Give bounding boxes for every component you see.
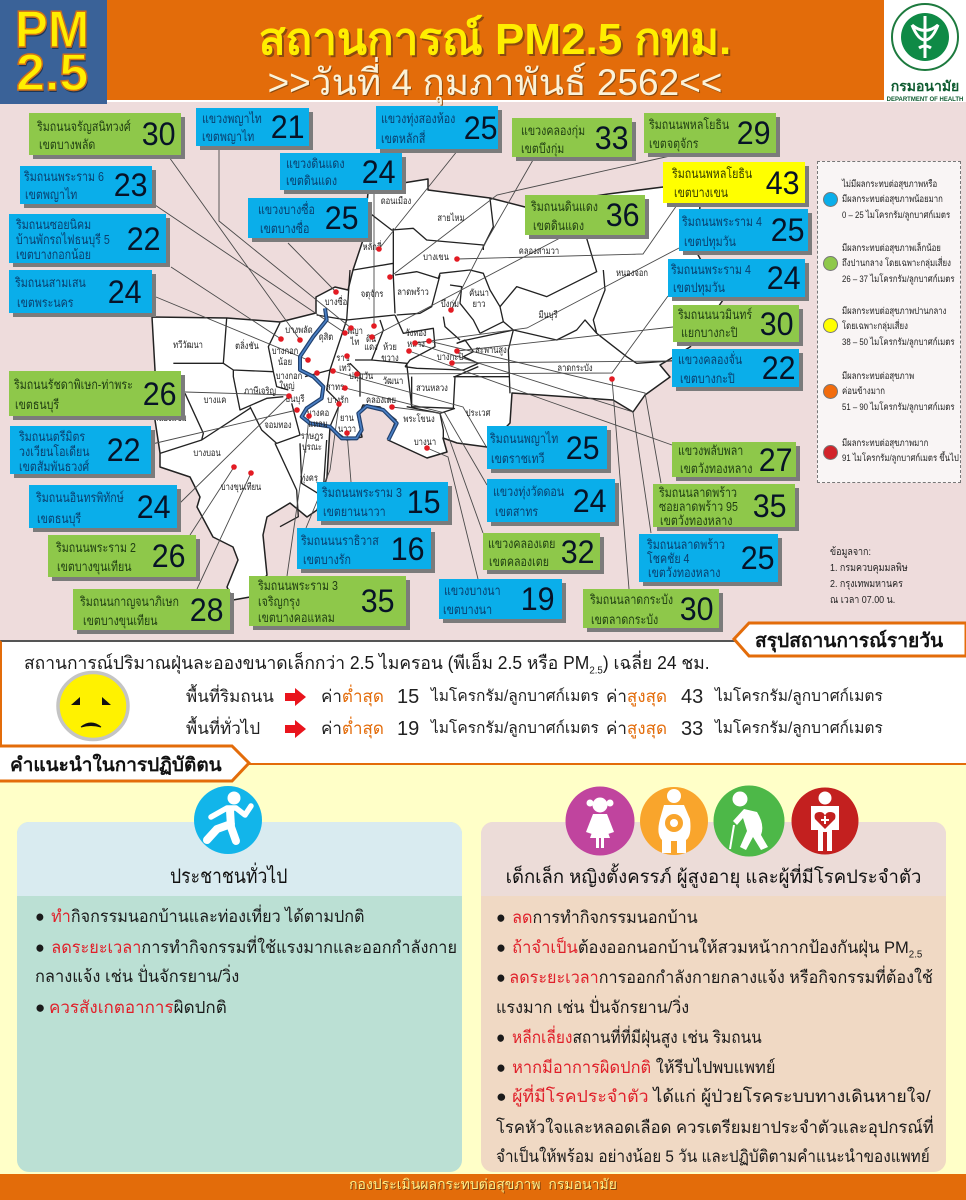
district names: น้อย	[278, 356, 292, 367]
footer bar: กองประเมินผลกระทบต่อสุขภาพ กรมอนามัย	[349, 1176, 617, 1192]
district names: คลองสามวา	[519, 245, 559, 256]
label: Phahonyothin Bang Khen 43: ริมถนนพหลโยธิน	[672, 166, 752, 181]
label: Ratchawithi Bang Rak 16	[297, 528, 431, 569]
district names: จอมทอง	[264, 419, 292, 430]
label: Khlong Kum 33: เขตบึงกุ่ม	[521, 141, 564, 156]
label: Phaya Thai 21: เขตพญาไท	[202, 129, 254, 144]
district names: ดุสิต	[319, 331, 333, 343]
label: Soi Nikhom 22: 22	[127, 220, 161, 256]
label: Rama 3 Yan Nawa 15: 15	[407, 484, 441, 520]
label: Inthara Phithak 24	[29, 485, 177, 528]
legend: yellow	[823, 306, 955, 348]
orange title band	[107, 0, 884, 100]
legend: yellow: โดยเฉพาะกลุ่มเสี่ยง	[842, 321, 908, 332]
label: Phahonyothin Bang Khen 43: 43	[766, 164, 800, 200]
district names: สายไหม	[437, 212, 465, 223]
label: Lat Phrao Chokchai 4 25: เขตวังทองหลาง	[648, 565, 720, 580]
label: Nawamin 30	[673, 305, 799, 342]
label: Samsen 24	[9, 270, 152, 313]
label: Thung Wat Don 24: เขตสาทร	[495, 504, 538, 519]
label: Din Daeng 24	[280, 153, 402, 190]
label: Phaya Thai Ratchathewi 25: ริมถนนพญาไท	[490, 431, 558, 446]
data source note: ณ เวลา 07.00 น.	[830, 594, 895, 606]
label: Khlong Chan 22: เขตบางกะปิ	[680, 371, 735, 386]
label: Phahonyothin Chatuchak 29	[644, 113, 776, 153]
label: Thung Wat Don 24: 24	[573, 482, 607, 518]
district names: นาวา	[338, 423, 356, 434]
label: Lat Phrao Chokchai 4 25: โชคชัย 4	[647, 551, 689, 566]
icon: chronic illness	[792, 788, 858, 854]
general public advice: ●	[35, 998, 45, 1017]
district names: คันนา	[469, 287, 489, 298]
label: Rama 4 Pathum Wan 24: เขตปทุมวัน	[673, 280, 725, 295]
at-risk advice: ●	[496, 1087, 507, 1106]
icon: running person	[194, 786, 262, 854]
label: Lat Krabang 30	[583, 589, 719, 628]
general public advice: กลางแจ้ง เช่น ปั่นจักรยาน/วิ่ง	[35, 967, 239, 986]
legend: red: มีผลกระทบต่อสุขภาพมาก	[842, 438, 928, 449]
label: Lat Phrao 95 35: ริมถนนลาดพร้าว	[659, 485, 737, 500]
district names: หลาง	[407, 338, 425, 349]
district names: ทุ่งครุ	[300, 472, 318, 484]
label: Rama 6 23	[20, 166, 152, 204]
label: Khlong Kum 33: แขวงคลองกุ่ม	[521, 123, 585, 138]
label: Nawamin 30: แยกบางกะปิ	[681, 325, 737, 340]
legend: orange: 51 – 90 ไมโครกรัม/ลูกบาศก์เมตร	[842, 402, 955, 413]
at-risk advice: ●	[496, 908, 506, 927]
label: Phaya Thai Ratchathewi 25: 25	[566, 430, 600, 466]
label: Din Daeng 24: แขวงดินแดง	[286, 156, 345, 171]
label: Samsen 24: 24	[108, 274, 142, 310]
label: Rama 4 Pathum Wan 25: ริมถนนพระราม 4	[682, 214, 762, 229]
data source note: 2. กรุงเทพมหานคร	[830, 578, 903, 590]
district names: สวนหลวง	[416, 382, 448, 393]
at-risk advice	[496, 908, 934, 1166]
district names: ตลิ่งชัน	[235, 339, 259, 351]
label: Inthara Phithak 24: 24	[137, 488, 171, 524]
label: Kanchanaphisek 28: เขตบางขุนเทียน	[83, 613, 158, 628]
district names: วัฒนา	[383, 375, 403, 386]
icon: pregnant woman	[640, 787, 708, 855]
label: Rama 3 Yan Nawa 15	[317, 482, 448, 521]
label: Rama 6 23: เขตพญาไท	[25, 187, 77, 202]
title: สถานการณ์ PM2.5 กทม.	[259, 15, 731, 64]
legend: blue: ไม่มีผลกระทบต่อสุขภาพหรือ	[842, 179, 937, 190]
label: Rama 3 Yan Nawa 15: เขตยานนาวา	[323, 504, 386, 519]
label: Din Daeng 24: 24	[362, 154, 396, 190]
label: Khlong Chan 22: แขวงคลองจั่น	[678, 352, 742, 367]
district names: หนองแขม	[153, 412, 187, 423]
label: Rama 2 26: 26	[152, 538, 186, 574]
label: Bang Sue 25: เขตบางซื่อ	[260, 221, 309, 236]
label: Rama 4 Pathum Wan 25: เขตปทุมวัน	[684, 234, 736, 249]
subtitle date: >>วันที่ 4 กุมภาพันธ์ 2562<<	[268, 62, 722, 103]
district names: บางคอ	[307, 407, 329, 418]
row: general area: ไมโครกรัม/ลูกบาศก์เมตร	[431, 720, 599, 737]
label: Lat Phrao Chokchai 4 25: 25	[741, 540, 775, 576]
row: general area: ไมโครกรัม/ลูกบาศก์เมตร	[715, 720, 883, 737]
district names: แดง	[364, 341, 378, 352]
label: Rama 6 23: ริมถนนพระราม 6	[24, 169, 104, 184]
row: general area: 33	[681, 718, 703, 740]
label: Phahonyothin Chatuchak 29: ริมถนนพหลโยธิน	[649, 117, 729, 132]
label: Ratchawithi Bang Rak 16: ริมถนนนราธิวาส	[301, 533, 379, 548]
row: general area: ค่าสูงสุด	[606, 719, 667, 738]
label: Soi Nikhom 22: เขตบางกอกน้อย	[16, 247, 91, 262]
label: Lat Phrao Chokchai 4 25	[639, 534, 778, 582]
label: Phahonyothin Bang Khen 43	[663, 162, 805, 203]
district names: หลักสี่	[363, 240, 382, 252]
general public heading: ประชาชนทั่วไป	[170, 866, 287, 888]
district names: ไท	[350, 336, 360, 347]
row: general area	[186, 716, 883, 740]
label: Nawamin 30: 30	[760, 306, 794, 342]
label: Charan Sanitwong 30: ริมถนนจรัญสนิทวงศ์	[37, 119, 131, 134]
label: Samsen 24: เขตพระนคร	[17, 295, 73, 310]
district names: ดอนเมือง	[381, 195, 411, 206]
row: general area: พื้นที่ทั่วไป	[186, 719, 260, 738]
legend: green: ถึงปานกลาง โดยเฉพาะกลุ่มเสี่ยง	[842, 258, 951, 269]
row: general area: ค่าต่ำสุด	[321, 719, 384, 738]
label: Khlong Toei 32: แขวงคลองเตย	[488, 536, 555, 551]
icon: elderly person	[714, 786, 784, 856]
label: Phlapphla 27	[672, 442, 796, 477]
at-risk advice: ●	[496, 1028, 505, 1047]
label: Soi Nikhom 22: ริมถนนซอยนิคม	[16, 217, 91, 232]
at-risk advice: หลีกเลี่ยงสถานที่ที่มีฝุ่นสูง เช่น ริมถนน	[512, 1028, 762, 1047]
label: Bang Na 19: 19	[521, 581, 555, 617]
row: roadside: 15	[397, 686, 419, 708]
label: Phaya Thai 21: 21	[271, 109, 305, 145]
legend: yellow: มีผลกระทบต่อสุขภาพปานกลาง	[842, 306, 946, 317]
label: Lat Phrao 95 35: เขตวังทองหลาง	[660, 513, 732, 528]
district names: สาทร	[326, 381, 344, 392]
label: Ratchawithi Bang Rak 16: เขตบางรัก	[303, 552, 351, 567]
label: Khlong Toei 32	[483, 533, 600, 570]
data source note: ข้อมูลจาก:	[830, 546, 871, 558]
label: Rama 4 Pathum Wan 25	[679, 209, 808, 251]
district names: บางกอก	[272, 345, 298, 356]
general public advice: ●	[35, 907, 45, 926]
district names: ราช	[336, 352, 350, 363]
header background	[0, 0, 966, 104]
district names: หนองจอก	[616, 267, 648, 278]
label: Phahonyothin Bang Khen 43: เขตบางเขน	[674, 185, 728, 200]
district names: ภาษีเจริญ	[244, 385, 276, 396]
at-risk advice: โรคหัวใจและหลอดเลือด ควรเตรียมยาประจำตัวและอุปกรณ์ที่	[496, 1118, 934, 1137]
label: Bang Na 19: แขวงบางนา	[444, 583, 501, 598]
label: Thung Song Hong 25: เขตหลักสี่	[381, 131, 425, 146]
district names: แหลม	[308, 418, 328, 429]
PM2.5 badge	[0, 0, 107, 104]
pink map background	[0, 102, 966, 640]
district names: ราษฎร	[301, 430, 324, 441]
district names: บางซื่อ	[325, 295, 347, 307]
panel: general public	[17, 822, 462, 1172]
footer bar	[0, 1174, 966, 1200]
legend: green: มีผลกระทบต่อสุขภาพเล็กน้อย	[842, 243, 941, 254]
district names: ดิน	[366, 333, 376, 344]
label: Lat Phrao 95 35	[653, 484, 795, 527]
summary headline: สถานการณ์ปริมาณฝุ่นละอองขนาดเล็กกว่า 2.5 ไมครอน (พีเอ็ม 2.5 หรือ PM2.5) เฉลี่ย 24 ชม.	[24, 653, 710, 677]
general public advice: ●	[35, 938, 45, 957]
label: Bang Na 19	[439, 579, 562, 619]
district names: ขวาง	[381, 352, 399, 363]
logo: department of health	[887, 3, 963, 103]
label: Bang Sue 25	[248, 198, 368, 238]
district names: บางบอน	[193, 447, 221, 458]
at-risk advice: ลดการทำกิจกรรมนอกบ้าน	[512, 908, 698, 927]
district names: ใหญ่	[279, 380, 295, 391]
label: Phaya Thai Ratchathewi 25: เขตราชเทวี	[491, 451, 544, 466]
label: Rama 3 Charoen Krung 35: 35	[361, 583, 395, 619]
label: Soi Nikhom 22: บ้านพักรถไฟธนบุรี 5	[16, 232, 110, 247]
label: Tri Mit 22	[10, 426, 151, 474]
district names: บางเขน	[423, 251, 449, 262]
tag: daily summary heading: สรุปสถานการณ์รายวัน	[755, 629, 944, 653]
label: Din Daeng 24: เขตดินแดง	[286, 173, 337, 188]
legend: blue	[823, 178, 950, 221]
label: Din Daeng road 36: 36	[606, 197, 640, 233]
label: Thung Song Hong 25: แขวงทุ่งสองห้อง	[381, 111, 455, 126]
district names: บางกอก	[276, 370, 302, 381]
label: Ratchadaphisek 26: เขตธนบุรี	[15, 397, 59, 412]
data source note	[830, 546, 908, 606]
label: Tri Mit 22: 22	[107, 432, 141, 468]
district names: บึงกุ่ม	[441, 298, 459, 310]
label: Ratchawithi Bang Rak 16: 16	[391, 530, 425, 566]
district names: จตุจักร	[361, 288, 384, 300]
legend panel	[817, 161, 961, 483]
label: Khlong Chan 22: 22	[762, 350, 796, 386]
label: Thung Song Hong 25	[376, 106, 498, 149]
at-risk advice: ●	[496, 938, 506, 957]
at-risk advice: ลดระยะเวลาการออกกำลังกายกลางแจ้ง หรือกิจกรรมที่ต้องใช้	[509, 968, 933, 987]
label: Inthara Phithak 24: ริมถนนอินทรพิทักษ์	[36, 490, 124, 505]
pollution monitoring dots	[231, 246, 615, 476]
label: Rama 4 Pathum Wan 24: 24	[767, 260, 801, 296]
label: Khlong Chan 22	[672, 349, 799, 387]
label: Phahonyothin Chatuchak 29: 29	[737, 115, 771, 151]
district names: ยาว	[473, 298, 486, 309]
district names: ลาดกระบัง	[557, 362, 593, 373]
label: Tri Mit 22: เขตสัมพันธวงศ์	[19, 459, 89, 474]
legend: orange	[823, 371, 955, 413]
at-risk advice: จำเป็นให้พร้อม อย่างน้อย 5 วัน และปฏิบัติตามคำแนะนำของแพทย์	[496, 1147, 930, 1166]
label: Lat Krabang 30: 30	[680, 590, 714, 626]
row: general area: 19	[397, 718, 419, 740]
label: Rama 4 Pathum Wan 24: ริมถนนพระราม 4	[671, 262, 751, 277]
row: roadside	[186, 684, 883, 708]
label: Lat Phrao 95 35: 35	[753, 488, 787, 524]
legend: red: 91 ไมโครกรัม/ลูกบาศก์เมตร ขึ้นไป	[842, 453, 959, 464]
label: Phlapphla 27: แขวงพลับพลา	[678, 443, 743, 458]
general public heading	[17, 822, 462, 896]
label: Khlong Kum 33	[512, 118, 632, 157]
label: Inthara Phithak 24: เขตธนบุรี	[37, 511, 81, 526]
label: Khlong Toei 32: เขตคลองเตย	[489, 554, 549, 569]
label: Tri Mit 22: วงเวียนโอเดียน	[19, 444, 90, 459]
district names: วังทอง	[405, 327, 427, 338]
label: Din Daeng road 36	[525, 195, 645, 235]
district names: พญา	[347, 325, 363, 336]
general public advice	[35, 904, 457, 1017]
at-risk advice: ●	[496, 968, 506, 987]
row: roadside: ไมโครกรัม/ลูกบาศก์เมตร	[431, 688, 599, 705]
label: Kanchanaphisek 28	[73, 589, 230, 630]
general public advice: ควรสังเกตอาการผิดปกติ	[49, 998, 227, 1017]
label: Thung Wat Don 24	[487, 479, 615, 522]
label: Rama 4 Pathum Wan 25: 25	[771, 212, 805, 248]
district names: บางรัก	[327, 394, 349, 405]
label: Phaya Thai 21: แขวงพญาไท	[202, 111, 262, 126]
panel: at-risk groups	[481, 822, 946, 1172]
label: Lat Krabang 30: เขตลาดกระบัง	[591, 612, 658, 627]
at-risk advice: ผู้ที่มีโรคประจำตัว ได้แก่ ผู้ป่วยโรคระบบทางเดินหายใจ/	[512, 1087, 931, 1106]
label: Din Daeng road 36: ริมถนนดินแดง	[531, 199, 598, 214]
label: Ratchadaphisek 26: 26	[143, 376, 177, 412]
label: Rama 2 26	[48, 535, 196, 577]
label: Rama 3 Charoen Krung 35: เจริญกรุง	[258, 594, 300, 609]
label: Kanchanaphisek 28: 28	[190, 592, 224, 628]
district names: บางพลัด	[285, 324, 313, 335]
at-risk advice: หากมีอาการผิดปกติ ให้รีบไปพบแพทย์	[512, 1058, 775, 1077]
row: roadside: ค่าต่ำสุด	[321, 687, 384, 706]
label: Bang Sue 25: แขวงบางซื่อ	[258, 202, 315, 217]
legend: blue: 0 – 25 ไมโครกรัม/ลูกบาศก์เมตร	[842, 210, 950, 221]
at-risk advice: แรงมาก เช่น ปั่นจักรยาน/วิ่ง	[496, 998, 689, 1017]
legend: blue: มีผลกระทบต่อสุขภาพน้อยมาก	[842, 194, 943, 205]
district names: ธนบุรี	[286, 393, 305, 405]
label: Bang Sue 25: 25	[325, 200, 359, 236]
district names: บูรณะ	[302, 441, 322, 453]
label: Soi Nikhom 22	[9, 214, 166, 263]
icon: sad face	[56, 670, 130, 742]
row: roadside: ค่าสูงสุด	[606, 687, 667, 706]
label: Thung Song Hong 25: 25	[464, 110, 498, 146]
label: Khlong Kum 33: 33	[595, 120, 629, 156]
district names: บางแค	[204, 394, 226, 405]
general public advice: ทำกิจกรรมนอกบ้านและท่องเที่ยว ได้ตามปกติ	[51, 907, 365, 926]
district names: ประเวศ	[466, 407, 491, 418]
PM2.5 badge: 2.5	[16, 44, 88, 102]
map of Bangkok districts with leader lines	[151, 150, 724, 601]
district names	[153, 195, 648, 493]
PM2.5 badge: PM	[15, 1, 89, 59]
label: Rama 6 23: 23	[114, 167, 148, 203]
panel: daily summary	[0, 640, 966, 765]
district names: ปทุมวัน	[349, 370, 373, 382]
district names: ทวีวัฒนา	[173, 339, 203, 350]
district names: บางขุนเทียน	[221, 481, 261, 493]
label: Din Daeng road 36: เขตดินแดง	[533, 218, 584, 233]
data source note: 1. กรมควบคุมมลพิษ	[830, 562, 908, 574]
legend: green	[823, 242, 955, 285]
label: Rama 3 Charoen Krung 35	[249, 576, 406, 626]
label: Rama 3 Charoen Krung 35: ริมถนนพระราม 3	[258, 578, 338, 593]
label: Tri Mit 22: ริมถนนตรีมิตร	[19, 429, 85, 444]
label: Bang Na 19: เขตบางนา	[443, 602, 492, 617]
at-risk heading	[481, 822, 946, 896]
label: Rama 2 26: ริมถนนพระราม 2	[56, 540, 136, 555]
label: Phlapphla 27: 27	[759, 442, 793, 478]
label: Charan Sanitwong 30: 30	[142, 116, 176, 152]
legend: red	[823, 438, 959, 464]
label: Nawamin 30: ริมถนนนวมินทร์	[678, 307, 752, 322]
at-risk advice: ถ้าจำเป็นต้องออกนอกบ้านให้สวมหน้ากากป้องกันฝุ่น PM2.5	[512, 938, 922, 960]
tag: advice heading	[0, 744, 251, 782]
legend: green: 26 – 37 ไมโครกรัม/ลูกบาศก์เมตร	[842, 274, 955, 285]
general public advice: ลดระยะเวลาการทำกิจกรรมที่ใช้แรงมากและออกกำลังกาย	[51, 938, 457, 957]
district names: ห้วย	[383, 341, 397, 352]
at-risk heading: เด็กเล็ก หญิงตั้งครรภ์ ผู้สูงอายุ และผู้ที่มีโรคประจำตัว	[506, 866, 921, 887]
label: Kanchanaphisek 28: ริมถนนกาญจนาภิเษก	[80, 594, 179, 609]
row: roadside: พื้นที่ริมถนน	[186, 687, 274, 706]
label: Thung Wat Don 24: แขวงทุ่งวัดดอน	[493, 484, 564, 499]
label: Phlapphla 27: เขตวังทองหลาง	[680, 461, 752, 476]
label: Charan Sanitwong 30: เขตบางพลัด	[39, 137, 95, 152]
label: Phaya Thai Ratchathewi 25	[487, 426, 607, 469]
logo: department of health: กรมอนามัย	[891, 78, 959, 94]
label: Charan Sanitwong 30	[29, 113, 181, 155]
district names: บางนา	[414, 436, 436, 447]
row: roadside: 43	[681, 686, 703, 708]
icon: child	[566, 786, 634, 856]
label: Rama 3 Charoen Krung 35: เขตบางคอแหลม	[258, 610, 335, 625]
label: Khlong Toei 32: 32	[561, 534, 595, 570]
legend: orange: ค่อนข้างมาก	[842, 386, 885, 397]
label: Ratchadaphisek 26	[9, 371, 181, 416]
label: Samsen 24: ริมถนนสามเสน	[15, 275, 86, 290]
label: Lat Krabang 30: ริมถนนลาดกระบัง	[590, 592, 673, 607]
district names: มีนบุรี	[538, 309, 558, 321]
district names: ลาดพร้าว	[397, 286, 429, 297]
Chao Phraya river	[300, 308, 397, 440]
legend: yellow: 38 – 50 ไมโครกรัม/ลูกบาศก์เมตร	[842, 337, 955, 348]
district names: ยาน	[340, 412, 354, 423]
district names: บางกะปิ	[437, 351, 463, 362]
tag: advice heading: คำแนะนำในการปฏิบัติตน	[10, 753, 222, 776]
label: Rama 4 Pathum Wan 24	[668, 259, 805, 297]
district names: พระโขนง	[403, 413, 435, 424]
label: Lat Phrao Chokchai 4 25: ริมถนนลาดพร้าว	[647, 537, 725, 552]
label: Phahonyothin Chatuchak 29: เขตจตุจักร	[649, 136, 698, 151]
at-risk advice: ●	[496, 1058, 506, 1077]
logo: department of health: DEPARTMENT OF HEALTH	[887, 97, 963, 103]
district names: เทวี	[339, 362, 351, 373]
legend: orange: มีผลกระทบต่อสุขภาพ	[842, 371, 914, 382]
label: Ratchadaphisek 26: ริมถนนรัชดาพิเษก-ท่าพระ	[14, 377, 133, 392]
district names: คลองเตย	[366, 394, 396, 405]
label: Lat Phrao 95 35: ซอยลาดพร้าว 95	[659, 499, 738, 514]
label: Rama 2 26: เขตบางขุนเทียน	[57, 559, 132, 574]
label: Phaya Thai 21	[196, 108, 309, 146]
row: roadside: ไมโครกรัม/ลูกบาศก์เมตร	[715, 688, 883, 705]
district names: สะพานสูง	[475, 344, 507, 356]
tag: daily summary heading	[732, 622, 966, 658]
label: Rama 3 Yan Nawa 15: ริมถนนพระราม 3	[322, 485, 402, 500]
